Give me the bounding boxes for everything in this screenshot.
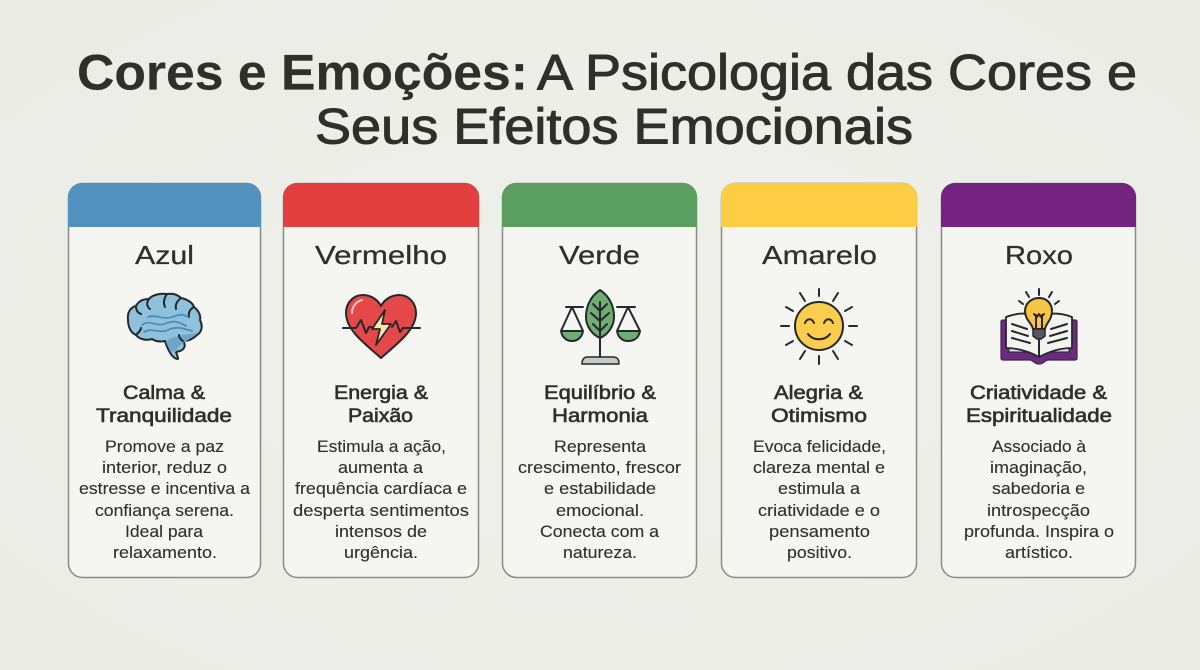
text: Azul description: relaxamento. (113, 544, 217, 562)
heading: Calma & Tranquilidade (96, 383, 232, 427)
text: Vermelho description: urgência. (344, 544, 418, 562)
text: Verde description: natureza. (563, 544, 637, 562)
text: Amarelo description: pensamento (769, 523, 870, 541)
text: Amarelo description (753, 438, 886, 562)
text: Verde description: crescimento, frescor (518, 459, 682, 477)
text: Amarelo description: criatividade e o (758, 502, 880, 520)
panel: Roxo (941, 183, 1136, 578)
color name: Roxo: Roxo (1005, 240, 1073, 270)
text: Roxo description (964, 438, 1114, 562)
panel: Amarelo (721, 183, 917, 578)
panel: Vermelho (283, 183, 479, 578)
text: Vermelho description (293, 438, 469, 562)
title: A Psicologia das Cores e (537, 44, 1137, 100)
color name: Vermelho: Vermelho (315, 240, 447, 270)
icon: open book with light bulb (1001, 289, 1077, 364)
heading: Calma & Tranquilidade: Calma & (123, 383, 205, 404)
heading: Equilíbrio & Harmonia: Harmonia (552, 406, 648, 427)
panel: Verde (502, 183, 697, 578)
text: Amarelo description: Evoca felicidade, (753, 438, 886, 456)
heading: Equilíbrio & Harmonia: Equilíbrio & (544, 383, 656, 404)
panel: Azul (68, 183, 261, 578)
text: Verde description: emocional. (556, 502, 644, 520)
text: Azul description: Promove a paz (105, 438, 224, 456)
text: Verde description: Conecta com a (540, 523, 660, 541)
text: Roxo description: sabedoria e (992, 480, 1085, 498)
text: Roxo description: Associado à (992, 438, 1087, 456)
text: Azul description: confiança serena. (95, 502, 234, 520)
icon: balance scale with leaf (561, 290, 640, 364)
color name: Verde: Verde (559, 240, 640, 270)
text: Roxo description: artístico. (1005, 544, 1073, 562)
heading: Alegria & Otimismo: Alegria & (774, 383, 863, 404)
text: Roxo description: introspecção (987, 502, 1090, 520)
icon: heart with pulse (343, 295, 420, 358)
text: Vermelho description: aumenta a (338, 459, 424, 477)
text: Vermelho description: Estimula a ação, (317, 438, 446, 456)
icon: smiling sun (781, 289, 857, 364)
heading: Criatividade & Espiritualidade: Espiritualidade (966, 406, 1112, 427)
title (77, 44, 1137, 154)
text: Azul description (79, 438, 251, 562)
text: Azul description: interior, reduz o (102, 459, 227, 477)
text: Verde description: e estabilidade (544, 480, 656, 498)
heading: Energia & Paixão: Energia & (334, 383, 428, 404)
text: Roxo description: imaginação, (990, 459, 1087, 477)
heading: Energia & Paixão: Paixão (348, 406, 413, 427)
heading: Alegria & Otimismo: Otimismo (771, 406, 867, 427)
text: Azul description: Ideal para (125, 523, 204, 541)
text: Amarelo description: positivo. (787, 544, 852, 562)
heading: Criatividade & Espiritualidade (966, 383, 1112, 427)
color name: Azul: Azul (135, 240, 194, 270)
text: Azul description: estresse e incentiva a (79, 480, 251, 498)
heading: Energia & Paixão (334, 383, 428, 427)
heading: Equilíbrio & Harmonia (544, 383, 656, 427)
title: Cores e Emoções: (77, 44, 528, 100)
text: Roxo description: profunda. Inspira o (964, 523, 1114, 541)
text: Vermelho description: intensos de (335, 523, 427, 541)
text: Amarelo description: clareza mental e (753, 459, 885, 477)
text: Vermelho description: frequência cardíaca e (295, 480, 467, 498)
text: Amarelo description: estimula a (778, 480, 861, 498)
text: Vermelho description: desperta sentimentos (293, 502, 469, 520)
color name: Amarelo: Amarelo (762, 240, 877, 270)
heading: Alegria & Otimismo (771, 383, 867, 427)
heading: Calma & Tranquilidade: Tranquilidade (96, 406, 232, 427)
heading: Criatividade & Espiritualidade: Criatividade & (970, 383, 1107, 404)
icon: brain (128, 294, 202, 359)
text: Verde description (518, 438, 682, 562)
text: Verde description: Representa (554, 438, 647, 456)
title: Seus Efeitos Emocionais (315, 98, 913, 154)
